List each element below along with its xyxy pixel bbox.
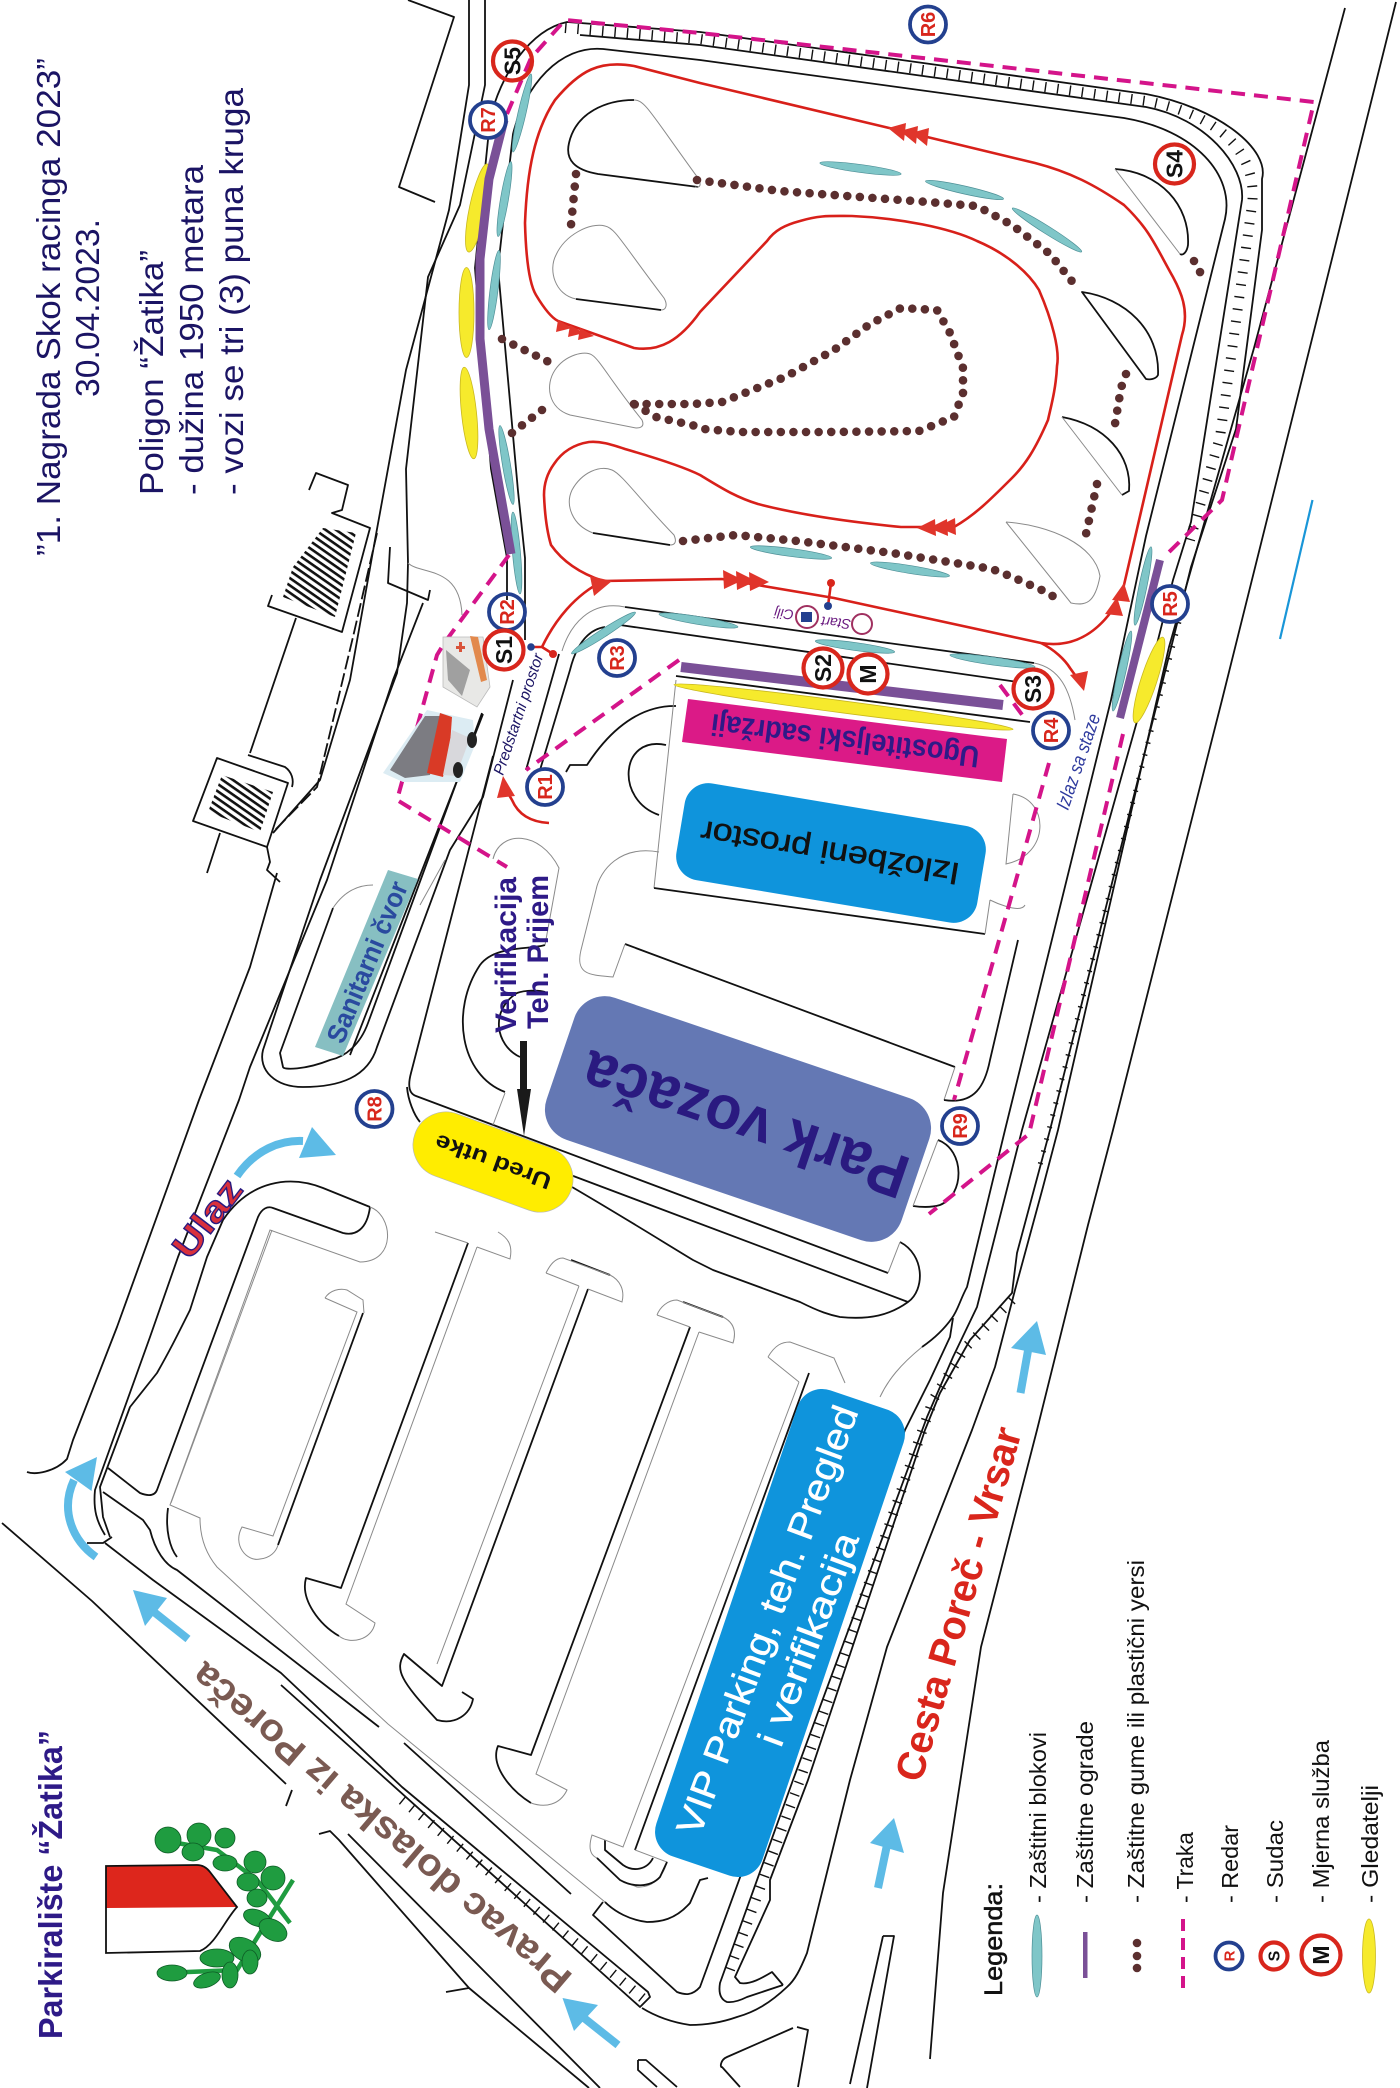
hatched building block 2: [208, 775, 273, 832]
marker R8: R8: [364, 1096, 386, 1122]
left main road: [27, 873, 277, 1473]
arrow: corner curve: [65, 1457, 97, 1557]
marker S1: S1: [491, 636, 517, 664]
direction arrows: [497, 123, 1130, 798]
legend entry: Zaštitni blokovi: - Zaštitni blokovi: [1025, 1732, 1051, 1903]
panel: VIP parking: [648, 1382, 912, 1884]
panel: VIP parking: VIP Parking, teh. Pregled: [669, 1400, 866, 1840]
spectator zones: yellow: [457, 162, 1171, 735]
icon: fire truck: [383, 710, 477, 782]
marker S5: S5: [500, 47, 526, 75]
marker R5: R5: [1160, 591, 1182, 617]
blue line: [1280, 500, 1312, 639]
title block: 30.04.2023.: [69, 219, 106, 397]
right main road: [930, 2, 1396, 2059]
icon: ambulance: [443, 636, 490, 707]
marker R9: [942, 1108, 978, 1144]
marker S4: S4: [1162, 150, 1188, 178]
marker R3: R3: [607, 645, 629, 671]
legend entry: Zaštitne ograde: [1072, 1721, 1098, 1978]
marker S2: [804, 648, 842, 688]
legend entry: Redar: R: [1221, 1950, 1238, 1961]
label: Ulaz: Ulaz: [163, 1170, 251, 1266]
arrow: pravac lower: [562, 1998, 618, 2045]
legend entry: Mjerna služba: [1302, 1740, 1340, 1974]
marker S3: [1014, 670, 1052, 708]
marker S1: [484, 630, 524, 670]
legend entry: Gledatelji: [1357, 1785, 1383, 1993]
marker R3: [599, 640, 635, 676]
parking perimeter: [100, 1182, 370, 1537]
title block: [30, 58, 250, 556]
hatched building block: [283, 528, 356, 617]
legend entry: Traka: - Traka: [1172, 1832, 1198, 1903]
marker S5: [493, 42, 532, 80]
legend entry: Mjerna služba: M: [1308, 1945, 1334, 1965]
heading: Parkiralište Žatika: Parkiralište “Žatika”: [32, 1730, 69, 2039]
start and finish labels: Cilj: [773, 605, 794, 623]
panel: Ugostiteljski sadržaji: Ugostiteljski sadržaji: [709, 707, 981, 773]
label: Pravac dolaska iz Poreča: Pravac dolaska iz Poreča: [183, 1653, 580, 2000]
legend entry: Sudac: - Sudac: [1262, 1820, 1288, 1903]
panel: Park vozača: [536, 988, 940, 1250]
panel: Park vozača: Park vozača: [573, 1036, 917, 1211]
marker R6: R6: [918, 12, 940, 37]
marker R4: [1033, 712, 1069, 748]
start and finish labels: Start: [819, 613, 852, 633]
marker R5: [1152, 586, 1188, 622]
tyre barriers: brown dots: [502, 174, 1206, 598]
track islands: [568, 100, 698, 187]
legend heading: Legenda:: [980, 1883, 1008, 1996]
pit lane lines: [620, 607, 1034, 722]
tick bands: [565, 28, 1253, 540]
marker R2: [489, 594, 525, 630]
legend entry: Gledatelji: - Gledatelji: [1357, 1785, 1383, 1903]
marker R8: [356, 1091, 392, 1127]
label: Predstartni prostor: Predstartni prostor: [491, 651, 548, 777]
marker R6: [910, 6, 946, 42]
shield: [106, 1865, 237, 1953]
legend entry: Sudac: [1260, 1820, 1288, 1970]
start and finish dots: [527, 579, 835, 658]
tape: magenta dashed lines: [397, 20, 1314, 1214]
legend: [980, 1560, 1383, 1997]
track walls: [498, 49, 1227, 1347]
legend entry: Sudac: S: [1267, 1950, 1284, 1961]
marker R2: R2: [497, 599, 519, 625]
label: Verifikacija Teh. Prijem: Teh. Prijem: [522, 875, 555, 1029]
title block: ”1. Nagrada Skok racinga 2023”: [30, 58, 67, 556]
marker M: [848, 654, 888, 694]
park enclosure: [350, 654, 559, 1055]
race track: red line with arrows: [497, 64, 1185, 823]
legend entry: Redar: - Redar: [1217, 1825, 1243, 1903]
legend entry: Zaštitne gume: - Zaštitne gume ili plastični yersi: [1123, 1560, 1149, 1903]
marker R4: R4: [1041, 717, 1063, 743]
panel: Izložbeni prostor: Izložbeni prostor: [698, 814, 962, 892]
arrow: black to race office: [517, 1041, 531, 1136]
label: Verifikacija Teh. Prijem: [490, 875, 555, 1033]
sanitary island: [280, 713, 482, 1069]
arrow: road bottom right: [1011, 1321, 1046, 1393]
marker R7: R7: [478, 107, 500, 133]
protective fences: purple: [480, 120, 1160, 718]
panel: Ured utke: [404, 1103, 582, 1221]
label: Verifikacija Teh. Prijem: Verifikacija: [490, 877, 523, 1033]
arrow: pravac upper: [133, 1590, 188, 1639]
legend entry: Zaštitni blokovi: [1025, 1732, 1051, 1997]
start and finish labels: [773, 605, 872, 634]
marker S3: S3: [1020, 675, 1046, 703]
arrow: entry curve: [237, 1127, 336, 1176]
wreath: [155, 1823, 293, 1991]
marker positions: [356, 6, 1194, 1144]
title block: Poligon “Žatika”: [133, 250, 170, 495]
marker R1: R1: [535, 774, 557, 800]
arrow: road lower: [870, 1818, 904, 1888]
protective barriers: teal blocks: [485, 73, 1155, 712]
panel: VIP parking: i verifikacija: [750, 1526, 867, 1752]
lower triangular islands: [850, 1936, 894, 2088]
legend entry: Mjerna služba: - Mjerna služba: [1308, 1740, 1334, 1903]
parking islands: [278, 1313, 363, 1545]
title block: - dužina 1950 metara: [173, 164, 210, 495]
label: Cesta Poreč - Vrsar: Cesta Poreč - Vrsar: [887, 1422, 1031, 1786]
legend entry: Redar: [1216, 1825, 1243, 1970]
marker R1: [527, 769, 563, 805]
panel: Izložbeni prostor: [673, 780, 989, 926]
coat of arms: [106, 1823, 293, 1991]
buildings: [268, 473, 370, 632]
marker S2: S2: [810, 654, 836, 682]
exhibition lines: [654, 680, 676, 888]
marker M: M: [855, 664, 881, 684]
panel: Ured utke: Ured utke: [431, 1129, 555, 1194]
label: Izlaz sa staze: Izlaz sa staze: [1053, 711, 1105, 813]
panel: Sanitarni čvor: Sanitarni čvor: [321, 877, 414, 1047]
legend entry: Zaštitne ograde: - Zaštitne ograde: [1072, 1721, 1098, 1903]
marker R9: R9: [950, 1113, 972, 1139]
title block: - vozi se tri (3) puna kruga: [213, 87, 250, 495]
marker R7: [470, 102, 506, 138]
marker S4: [1155, 144, 1194, 184]
